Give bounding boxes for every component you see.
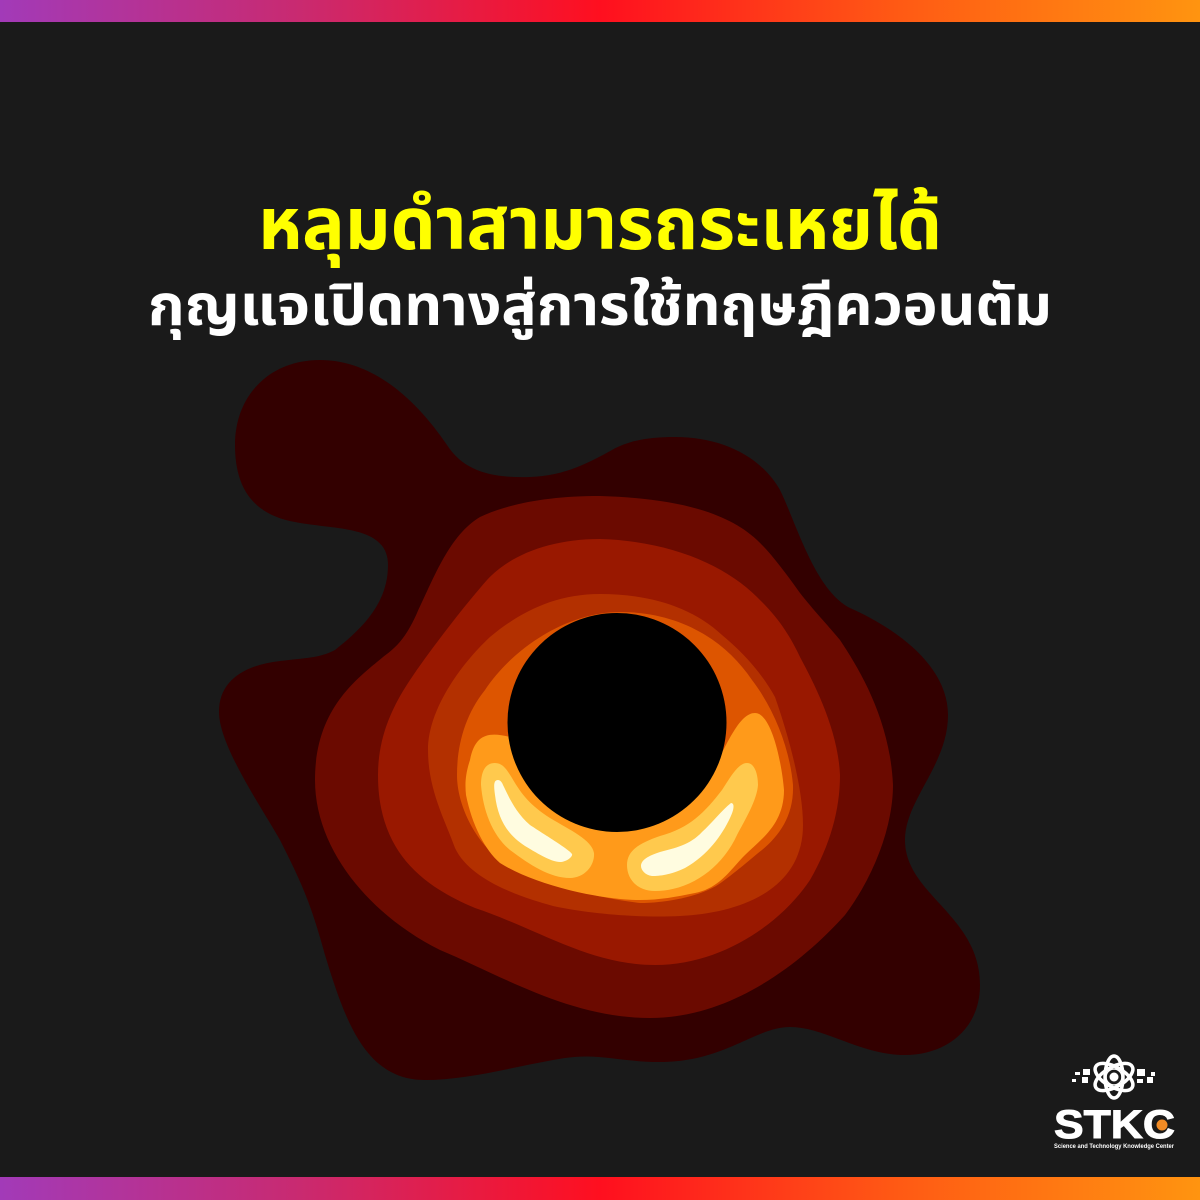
headline: yellow: หลุมดำสามารถระเหยได้ <box>258 184 942 268</box>
bright orange crescent <box>465 713 784 900</box>
logo tagline: Science and Technology Knowledge Center <box>1054 1144 1175 1150</box>
red layer <box>378 539 840 965</box>
yellow hot spot left <box>481 763 594 878</box>
white core right <box>641 803 734 876</box>
icon: atom with pixel dots <box>1072 1056 1155 1098</box>
orange layer <box>457 612 793 903</box>
black hole illustration <box>219 360 980 1080</box>
outer glow layer <box>219 360 980 1080</box>
bottom gradient bar <box>0 1177 1200 1200</box>
black hole shadow <box>508 613 726 832</box>
red-orange layer <box>428 594 803 917</box>
yellow hot spot right <box>627 763 758 891</box>
top gradient bar <box>0 0 1200 22</box>
STKC logo <box>1054 1056 1175 1150</box>
subheadline: white: กุญแจเปิดทางสู่การใช้ทฤษฎีควอนตัม <box>148 274 1052 340</box>
dark red layer <box>315 496 893 1018</box>
title <box>148 184 1052 340</box>
logo orange dot <box>1156 1120 1168 1130</box>
white core left <box>494 780 572 862</box>
logo wordmark: STKC <box>1054 1103 1175 1147</box>
